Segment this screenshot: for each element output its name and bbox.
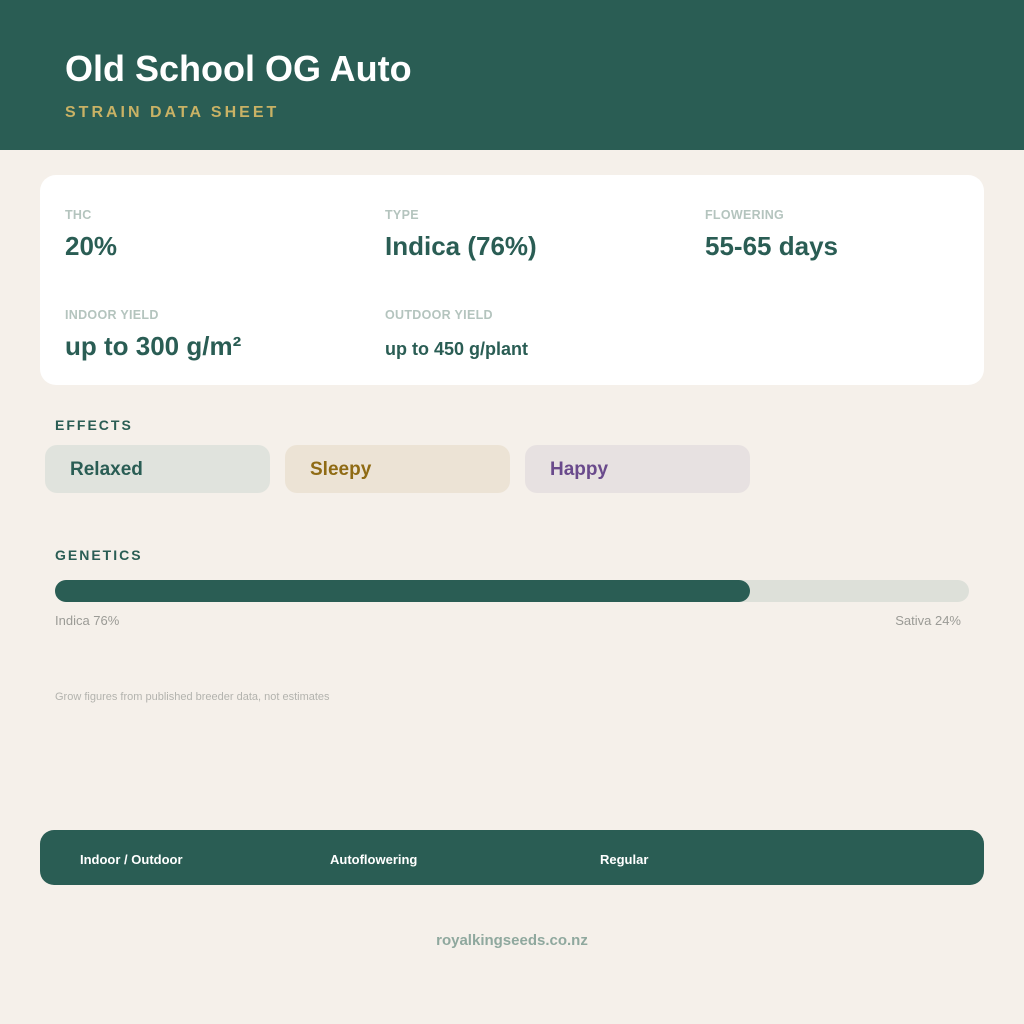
stat: indoor yield: up to 300 g/m² bbox=[65, 331, 241, 361]
pill: happy: Happy bbox=[550, 459, 608, 480]
panel: strain stats bbox=[40, 175, 984, 385]
heading: genetics: GENETICS bbox=[55, 547, 143, 563]
attribute: seed type: Regular bbox=[600, 852, 648, 867]
attribute: environment: Indoor / Outdoor bbox=[80, 852, 183, 867]
stat: THC: THC bbox=[65, 208, 92, 222]
stat: type bbox=[385, 208, 537, 261]
pill: relaxed bbox=[45, 445, 270, 493]
title: Old School OG Auto bbox=[65, 48, 412, 89]
label: sativa: Sativa 24% bbox=[895, 613, 961, 628]
genetics bar bbox=[55, 580, 969, 602]
footnote: Grow figures from published breeder data, not estimates bbox=[55, 691, 330, 703]
source url: royalkingseeds.co.nz bbox=[436, 932, 588, 949]
stat: flowering: 55-65 days bbox=[705, 231, 838, 261]
label: indica: Indica 76% bbox=[55, 613, 119, 628]
panel: footer attributes bbox=[40, 830, 984, 885]
stat: outdoor yield: up to 450 g/plant bbox=[385, 339, 528, 359]
stat: type: Indica (76%) bbox=[385, 231, 537, 261]
pill: relaxed: Relaxed bbox=[70, 459, 143, 480]
subtitle: STRAIN DATA SHEET bbox=[65, 104, 279, 121]
heading: effects: EFFECTS bbox=[55, 417, 133, 433]
stat: type: TYPE bbox=[385, 208, 419, 222]
stat: indoor yield: INDOOR YIELD bbox=[65, 308, 159, 322]
stat: flowering: FLOWERING bbox=[705, 208, 784, 222]
pill: happy bbox=[525, 445, 750, 493]
pill: sleepy bbox=[285, 445, 510, 493]
attribute: flowering type: Autoflowering bbox=[330, 852, 417, 867]
stat: THC bbox=[65, 208, 117, 261]
stat: outdoor yield bbox=[385, 308, 528, 359]
header band bbox=[0, 0, 1024, 150]
pill: sleepy: Sleepy bbox=[310, 459, 371, 480]
stat: indoor yield bbox=[65, 308, 241, 361]
stat: flowering bbox=[705, 208, 838, 261]
stat: outdoor yield: OUTDOOR YIELD bbox=[385, 308, 493, 322]
indica share bbox=[55, 580, 750, 602]
stat: THC: 20% bbox=[65, 231, 117, 261]
